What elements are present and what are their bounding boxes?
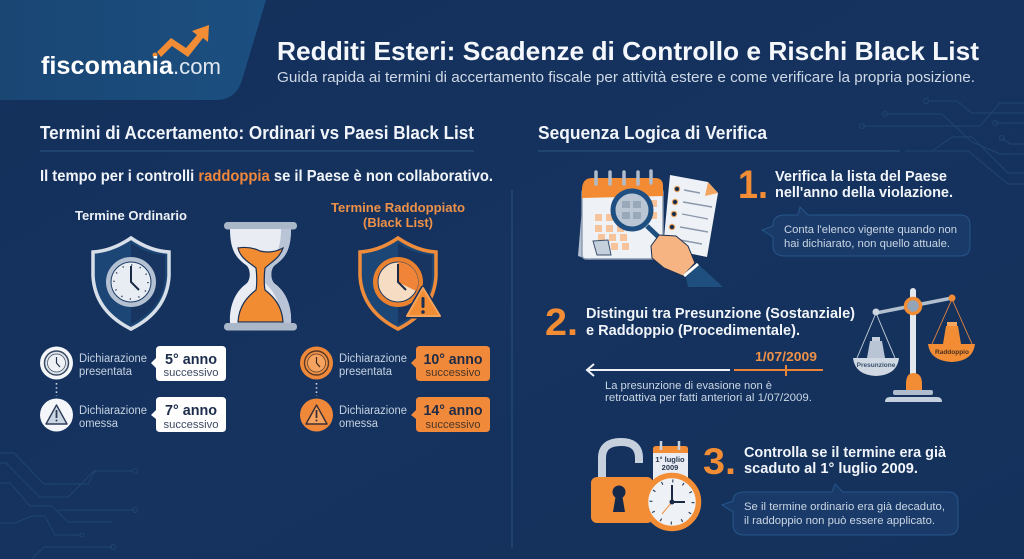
- step 3 heading: scaduto al 1° luglio 2009.: [744, 461, 918, 477]
- subtitle: Guida rapida ai termini di accertamento fiscale per attività estere e come verificare la propria posizione.: [277, 70, 975, 86]
- header logo panel: [0, 0, 266, 100]
- text: dichiarazione omessa: [79, 405, 147, 430]
- heading: termine raddoppiato: [331, 200, 465, 230]
- step 1 number: 1.: [738, 163, 768, 207]
- step 2 note: retroattiva per fatti anteriori al 1/07/2009.: [605, 392, 812, 404]
- text: dichiarazione omessa: omessa: [79, 418, 119, 430]
- callout: 7 anno: successivo: [164, 419, 218, 431]
- icon: padlock, calendar and clock: 1° luglio: [655, 455, 685, 464]
- icon: ordinary filed clock: [40, 346, 73, 380]
- panel: termini di accertamento: [40, 123, 493, 432]
- timeline arrow: [587, 364, 823, 376]
- icon: calendar, checklist, magnifier and hand: [578, 171, 723, 287]
- callout: 7 anno: [151, 397, 226, 432]
- icon: black list filed clock: [300, 346, 333, 380]
- step 2 heading: Distingui tra Presunzione (Sostanziale): [586, 306, 855, 322]
- step 1 heading: nell'anno della violazione.: [775, 185, 953, 201]
- icon: padlock, calendar and clock: [591, 441, 698, 528]
- text: dichiarazione presentata: Dichiarazione: [79, 353, 147, 365]
- left section heading: Termini di Accertamento: Ordinari vs Paesi Black List: [40, 123, 474, 143]
- callout: 10 anno: 10° anno: [424, 351, 482, 368]
- step 2 number: 2.: [545, 302, 578, 344]
- logo domain suffix: .com: [173, 54, 221, 79]
- step 2 heading: [586, 306, 855, 339]
- logo arrow icon: [152, 25, 209, 58]
- icon: scales: [853, 288, 975, 402]
- callout: 10 anno: successivo: [426, 367, 480, 379]
- icon: black list shield with clock and warning: [360, 238, 440, 329]
- title: Redditi Esteri: Scadenze di Controllo e Rischi Black List: [277, 36, 979, 66]
- text: dichiarazione omessa black list: [339, 405, 407, 430]
- icon: ordinary shield with clock: [93, 238, 169, 329]
- text: dichiarazione presentata black list: [339, 353, 407, 378]
- heading: termine raddoppiato: (Black List): [363, 215, 433, 230]
- callout: 14 anno: successivo: [426, 419, 480, 431]
- icon: ordinary omitted warning: [40, 398, 73, 432]
- date label: 1/07/2009: [755, 350, 817, 364]
- step 1 callout: hai dichiarato, non quello attuale.: [784, 238, 950, 250]
- icon: hourglass: [224, 222, 297, 330]
- heading: termine ordinario: Termine Ordinario: [75, 209, 187, 223]
- text: dichiarazione presentata: [79, 353, 147, 378]
- step 2 heading: e Raddoppio (Procedimentale).: [586, 323, 800, 339]
- text: dichiarazione omessa black list: omessa: [339, 418, 379, 430]
- text: dichiarazione presentata black list: presentata: [339, 366, 393, 378]
- text: dichiarazione omessa black list: Dichiarazione: [339, 405, 407, 417]
- step 1 heading: [775, 169, 953, 201]
- step 2 note: [605, 380, 812, 404]
- step 1 callout: Conta l'elenco vigente quando non: [784, 224, 957, 236]
- icon: scales: Raddoppio: [935, 349, 969, 356]
- icon: padlock, calendar and clock: 2009: [662, 463, 678, 472]
- heading: termine raddoppiato: Termine Raddoppiato: [331, 200, 465, 215]
- panel: sequenza logica di verifica: [538, 123, 975, 535]
- callout: 14 anno: [411, 397, 490, 432]
- step 3 heading: Controlla se il termine era già: [744, 445, 947, 461]
- callout: 10 anno: [411, 346, 490, 381]
- icon: scales: Presunzione: [857, 362, 896, 369]
- text: dichiarazione omessa: Dichiarazione: [79, 405, 147, 417]
- step 3 heading: [744, 445, 947, 477]
- callout: 5 anno: [151, 346, 226, 381]
- right section heading: Sequenza Logica di Verifica: [538, 123, 768, 143]
- callout: 7 anno: 7° anno: [165, 402, 217, 419]
- icon: black list omitted warning: [300, 398, 333, 432]
- step 3 callout: il raddoppio non può essere applicato.: [744, 515, 935, 527]
- step 2 note: La presunzione di evasione non è: [605, 380, 772, 392]
- left subheading: Il tempo per i controlli raddoppia se il Paese è non collaborativo.: [40, 168, 493, 185]
- step 3 callout: [722, 484, 958, 535]
- callout: 5 anno: successivo: [164, 367, 218, 379]
- text: dichiarazione presentata: presentata: [79, 366, 133, 378]
- text: dichiarazione presentata black list: Dichiarazione: [339, 353, 407, 365]
- step 1 callout: [762, 207, 970, 256]
- callout: 5 anno: 5° anno: [165, 351, 217, 368]
- callout: 14 anno: 14° anno: [424, 402, 482, 419]
- step 3 callout: Se il termine ordinario era già decaduto,: [744, 501, 945, 513]
- step 1 heading: Verifica la lista del Paese: [775, 169, 947, 185]
- logo wordmark: fiscomania: [41, 52, 174, 80]
- logo: [41, 25, 209, 80]
- step 3 number: 3.: [703, 441, 736, 482]
